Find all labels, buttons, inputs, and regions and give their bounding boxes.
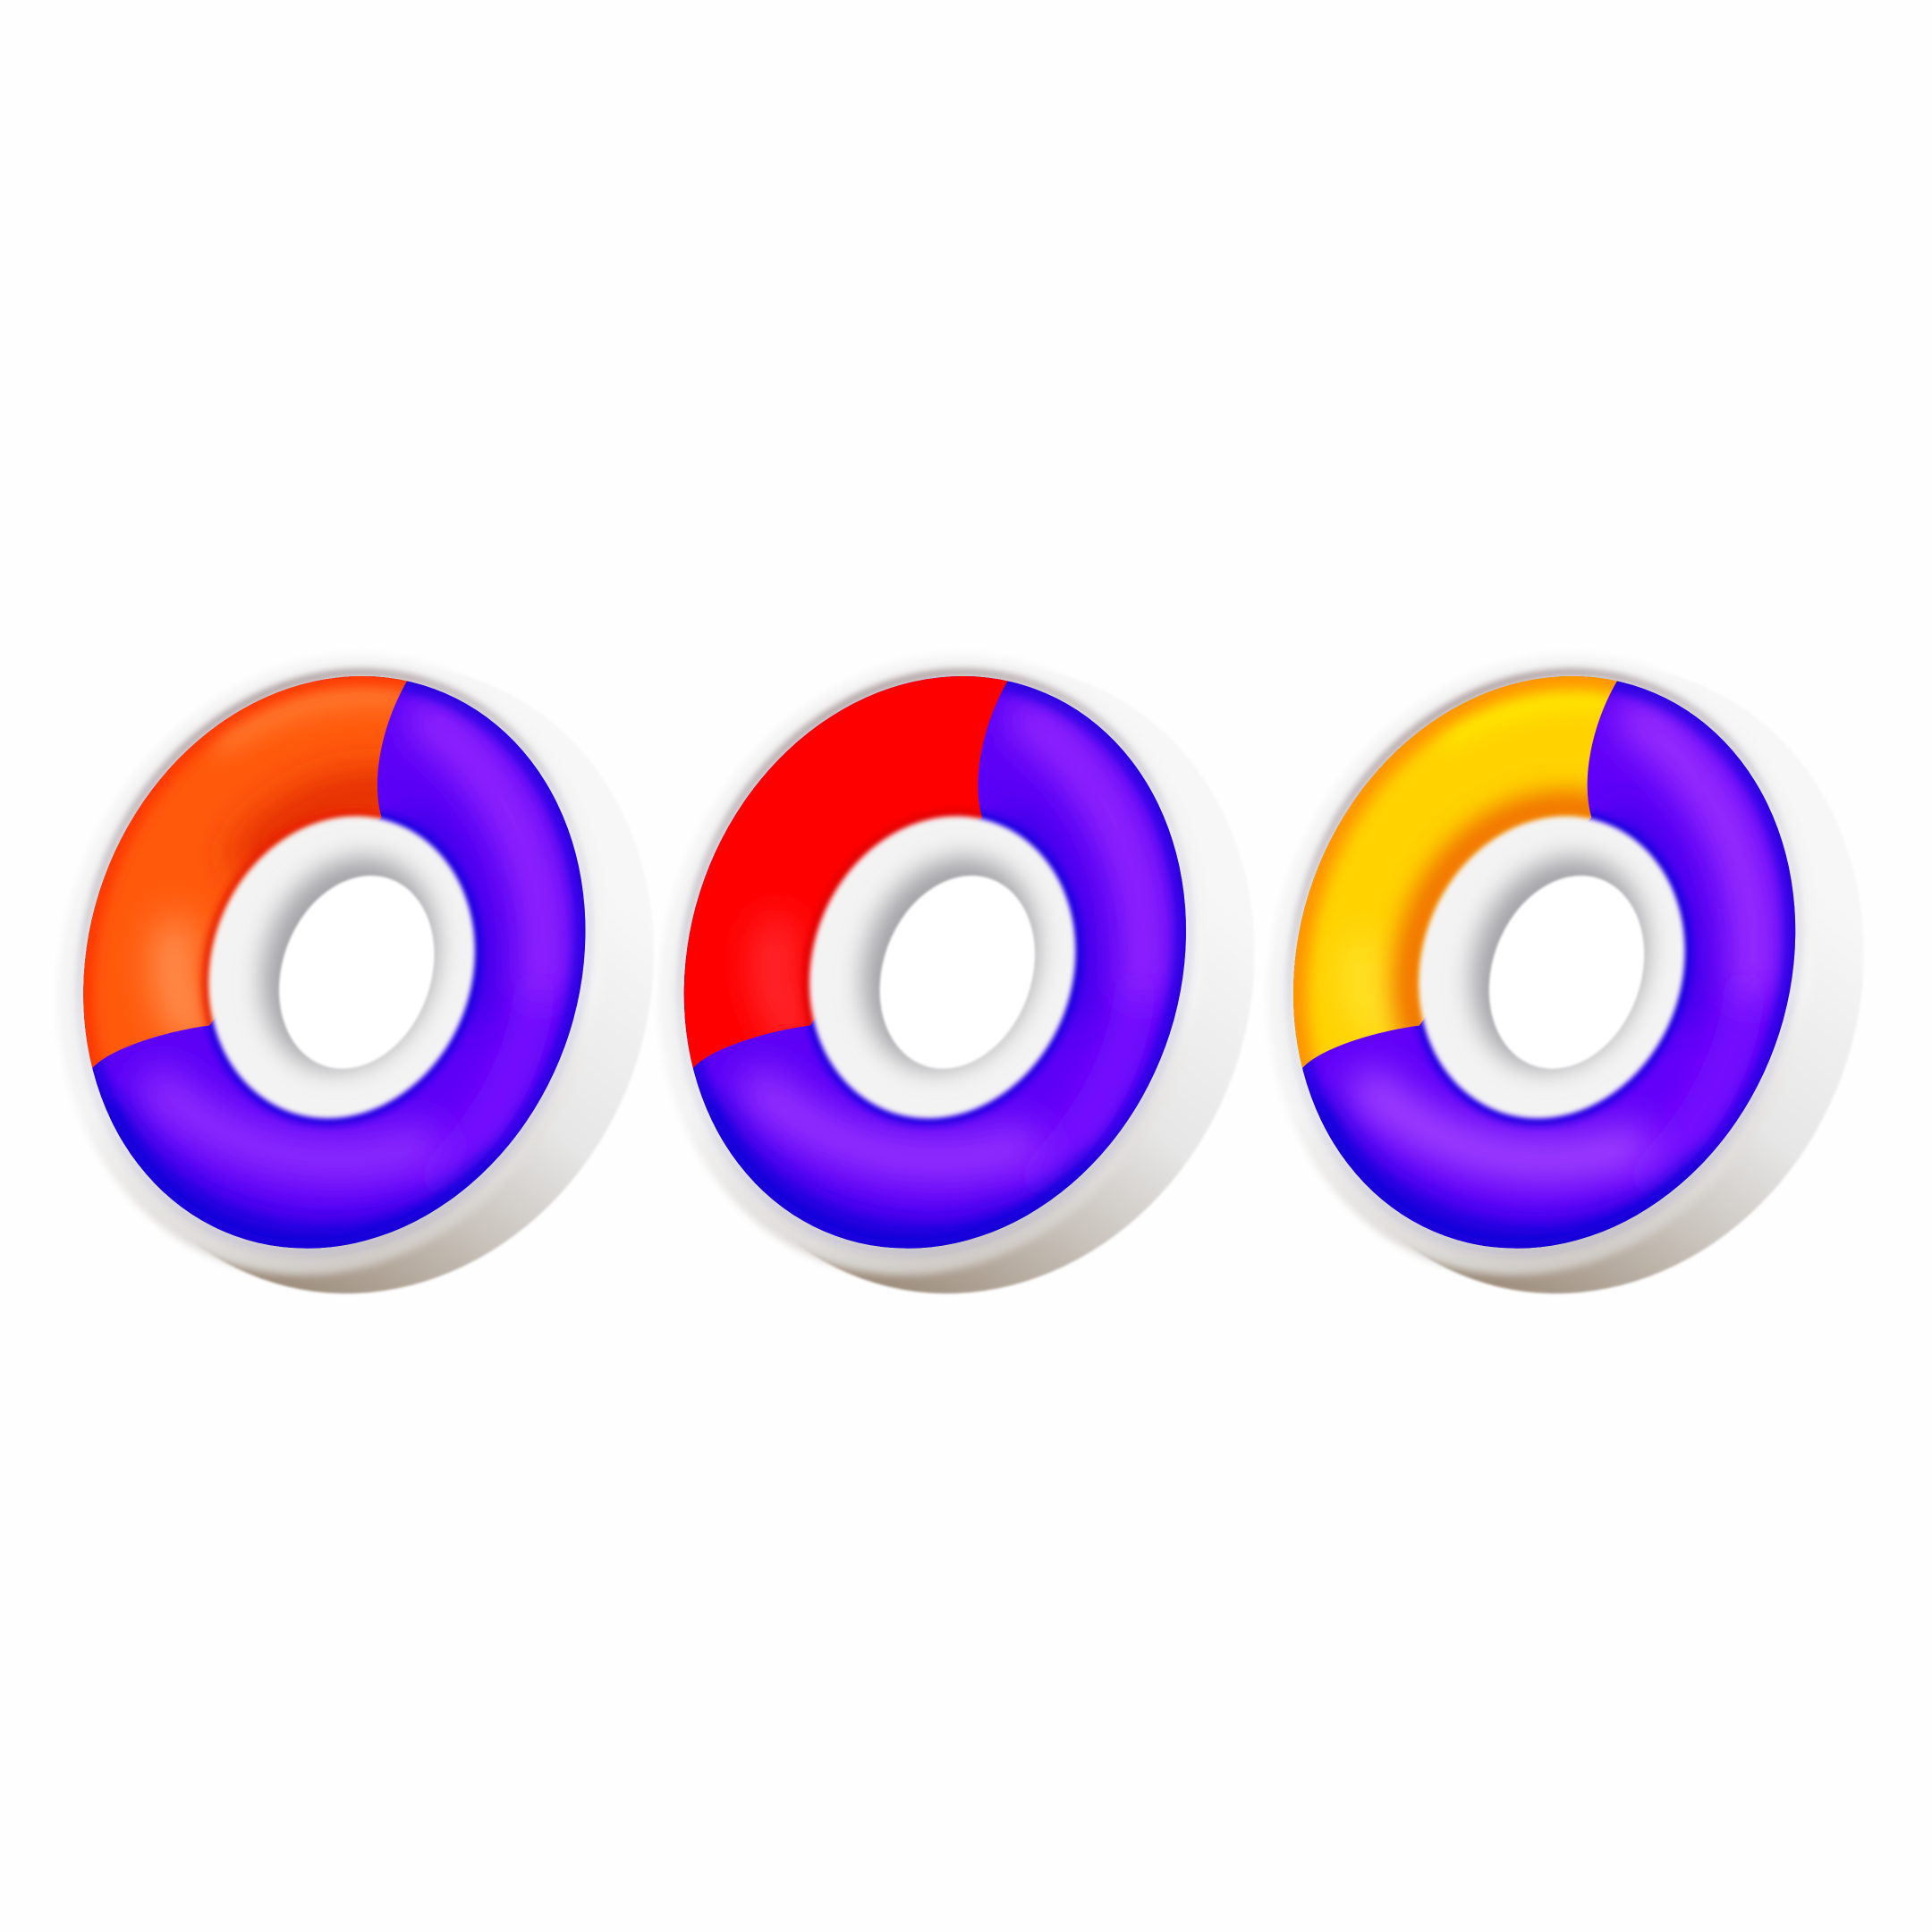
donut chart: orange and purple	[63, 660, 652, 1295]
center hole	[253, 853, 461, 1090]
rim shadow	[1209, 600, 1879, 1325]
colored segment: yellow	[1293, 676, 1617, 1068]
colored ring	[83, 676, 585, 1249]
rim shadow	[600, 600, 1270, 1325]
center hole	[853, 853, 1061, 1090]
colored segment: orange	[83, 676, 407, 1068]
colored ring	[1293, 676, 1796, 1249]
inner white torus	[1377, 778, 1726, 1156]
inner white torus	[167, 778, 516, 1156]
illustration: three 3D donut charts	[63, 659, 1862, 1295]
donut chart: yellow and purple	[1272, 659, 1862, 1295]
center hole	[1463, 853, 1670, 1090]
purple segment	[83, 676, 585, 1249]
inner white torus	[767, 778, 1117, 1156]
torus inner shadow	[1458, 843, 1661, 1084]
front rim	[573, 577, 1292, 1353]
purple segment	[1293, 676, 1796, 1249]
white donut body	[1209, 585, 1932, 1374]
torus inner shadow	[247, 843, 451, 1084]
front rim	[0, 577, 691, 1353]
white donut body	[600, 585, 1342, 1374]
colored ring	[683, 676, 1186, 1249]
torus inner shadow	[848, 843, 1052, 1084]
rim shadow	[0, 600, 669, 1325]
purple segment	[683, 676, 1186, 1249]
colored segment: red	[683, 676, 1007, 1068]
front rim	[1182, 577, 1902, 1353]
white donut body	[0, 585, 741, 1374]
donut chart: red and purple	[664, 660, 1253, 1295]
